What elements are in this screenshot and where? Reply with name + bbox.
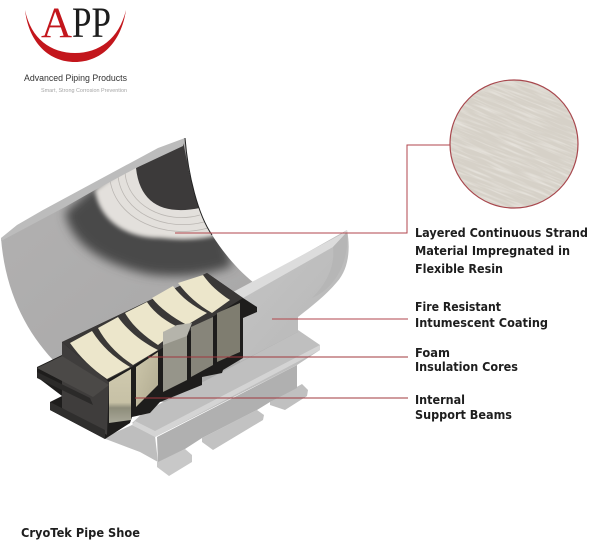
core top 2 (98, 317, 158, 365)
dark band (65, 150, 232, 276)
leader: foam cores (148, 356, 408, 358)
foot 2 (202, 410, 264, 450)
label: layered strand: Material Impregnated in (415, 244, 570, 258)
core top 4 (152, 286, 207, 325)
logo: Advanced Piping Products (24, 0, 127, 94)
core top 1 (70, 331, 130, 379)
foot 3 (157, 449, 192, 476)
upper plate (37, 356, 109, 397)
foot 1 (270, 384, 308, 410)
lower left body (103, 425, 158, 462)
front half of shell with intumescent coating (232, 230, 349, 362)
company name: Advanced Piping Products (24, 73, 127, 84)
core side 1 (109, 369, 131, 423)
leader: coating (272, 318, 408, 320)
left dark face (62, 342, 109, 435)
label: layered strand: Layered Continuous Strand (415, 226, 588, 240)
base with feet and flange (103, 316, 320, 476)
shell lip (233, 230, 347, 298)
top lip of back shell (1, 138, 185, 241)
label: layered strand: Flexible Resin (415, 262, 503, 276)
core side 3 (163, 325, 187, 392)
leader: layered strand to circle (175, 145, 450, 233)
label: layered strand (415, 226, 588, 276)
callout: fibre texture circle (449, 79, 579, 209)
core side 5 (217, 303, 240, 362)
core top 3 (125, 302, 180, 345)
label: beams: Internal (415, 393, 465, 407)
label: coating (415, 300, 548, 330)
shell end curve (312, 232, 347, 298)
dark core arc (136, 140, 200, 210)
leader: support beams (135, 397, 408, 399)
lower plate (50, 402, 105, 439)
label: beams (415, 393, 512, 422)
pale layered band (95, 165, 215, 239)
foam insulation cores (70, 275, 240, 423)
front body (157, 365, 297, 462)
logo crescent (25, 10, 126, 62)
core side 2 (136, 352, 158, 407)
upper body below shell (160, 316, 298, 402)
logo: Advanced Piping Products: PP (72, 0, 111, 47)
label: foam: Foam (415, 346, 450, 360)
core top 5 (178, 275, 230, 313)
caption: CryoTek Pipe Shoe (21, 525, 140, 540)
insulated block: dark frame and flanges (37, 273, 257, 439)
flange (132, 330, 320, 437)
pipe shoe cutaway illustration (1, 138, 349, 476)
label: foam: Insulation Cores (415, 360, 518, 374)
label: coating: Intumescent Coating (415, 316, 548, 330)
back half of shell with resin layers (1, 138, 254, 365)
label: beams: Support Beams (415, 408, 512, 422)
label: foam (415, 346, 518, 374)
label: coating: Fire Resistant (415, 300, 501, 314)
logo letters APP: A (41, 0, 72, 47)
tagline: Smart, Strong Corrosion Prevention (41, 88, 127, 94)
core side 4 (191, 317, 213, 377)
